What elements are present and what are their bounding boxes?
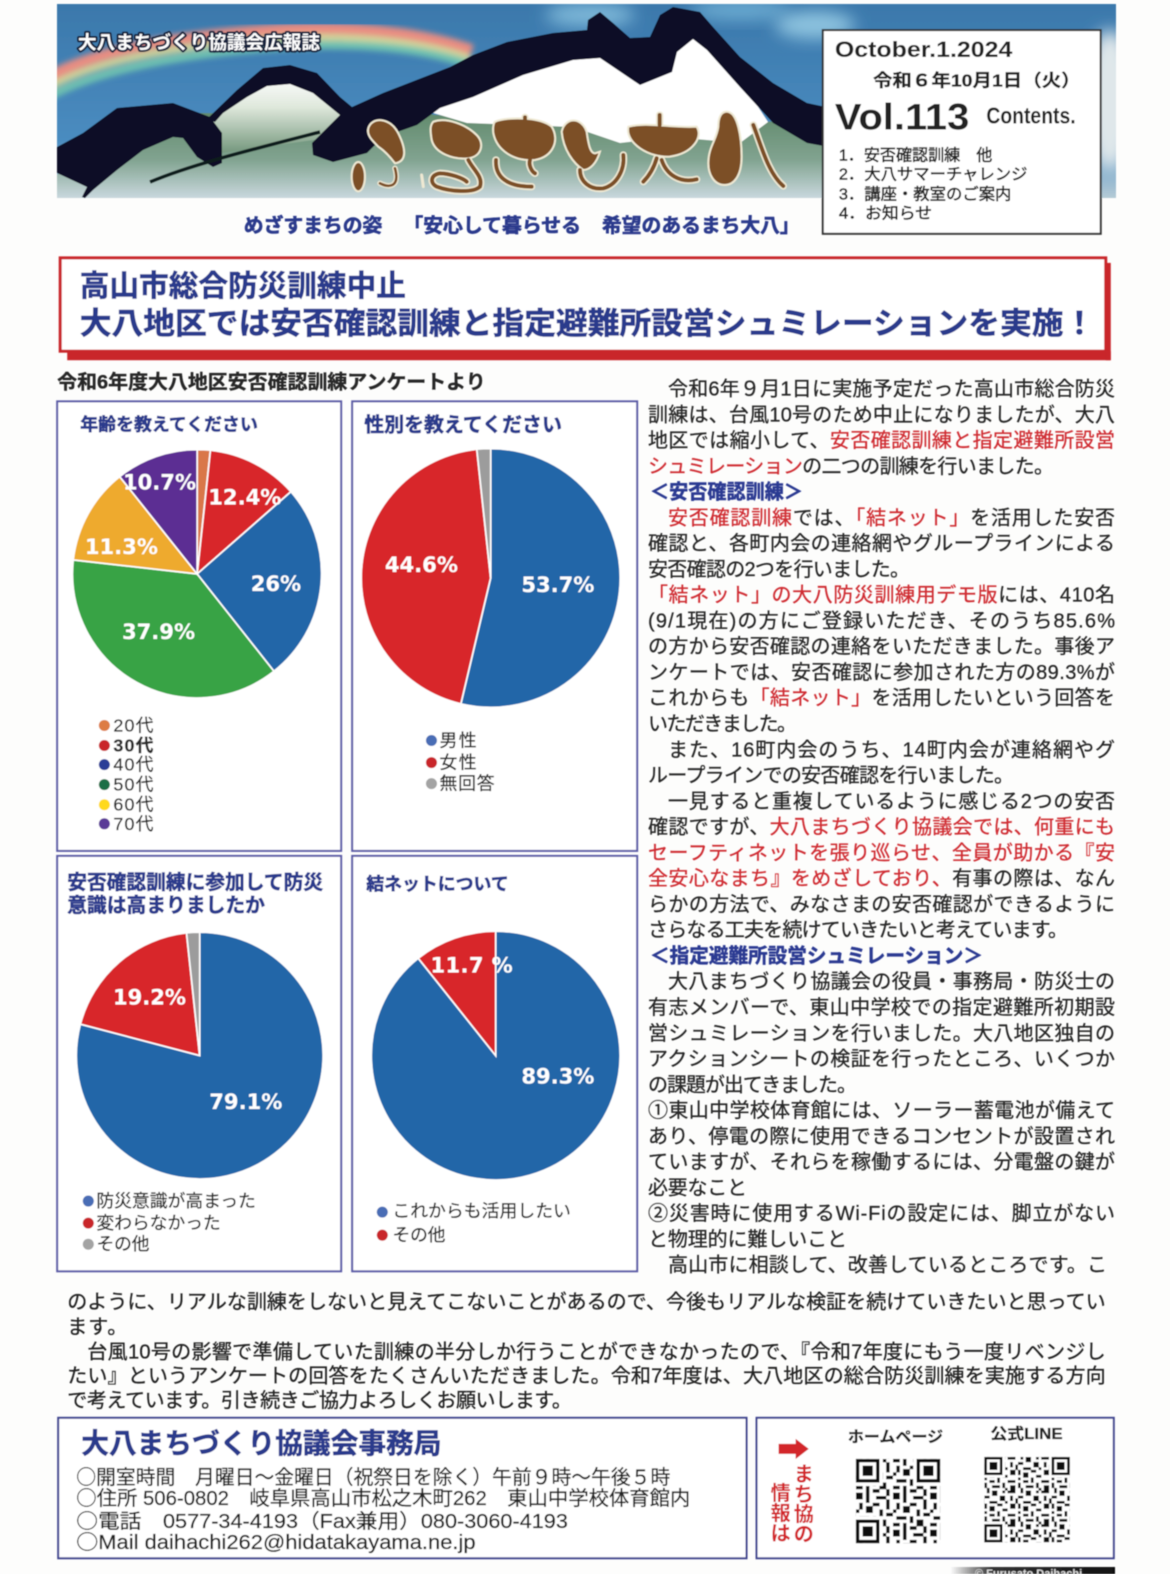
ink mountains <box>57 7 840 198</box>
contents box: Vol.113 <box>835 95 969 137</box>
main article text: 高山市に相談して、改善しているところです。こ <box>668 1254 1107 1277</box>
main article text: 確認と、各町内会の連絡網やグループラインによる <box>648 532 1115 555</box>
office contact box: 大八まちづくり協議会事務局 <box>81 1428 441 1459</box>
snow peak large <box>430 34 768 143</box>
contact details <box>76 1461 690 1555</box>
vision slogan <box>244 214 800 237</box>
vision slogan: めざすまちの姿 <box>244 214 382 237</box>
QR caption: homepage: ホームページ <box>848 1428 943 1446</box>
office contact box <box>58 1418 747 1558</box>
contents list: 4．お知らせ <box>839 205 932 223</box>
vision slogan: 「安心して暮らせる <box>403 215 581 237</box>
closing paragraph: たい』というアンケートの回答をたくさんいただきました。令和7年度は、大八地区の総合防災訓練を実施する方向 <box>67 1365 1106 1388</box>
panel: gender pie chart: 性別を教えてください <box>364 414 562 436</box>
headline box: 大八地区では安否確認訓練と指定避難所設営シュミレーションを実施！ <box>80 307 1095 341</box>
main article text: 安否確認の2つを行いました。 <box>648 558 910 581</box>
panel: Yui-net pie chart: 結ネットについて <box>366 874 509 894</box>
panel: age pie chart: 12.4% <box>208 485 281 510</box>
legend: age: 40代 <box>113 755 154 775</box>
panel: gender pie chart: 44.6% <box>385 552 458 577</box>
main article text: これからも「結ネット」を活用したいという回答を <box>648 687 1115 710</box>
legend: awareness: 防災意識が高まった <box>96 1191 256 1211</box>
main article text: ンケートでは、安否確認に参加された方の89.3%が <box>648 661 1115 684</box>
legend: age: 20代 <box>113 715 154 735</box>
main article text: らかの方法で、みなさまの安否確認ができるように <box>648 893 1115 916</box>
masthead banner <box>40 0 1136 198</box>
legend: Yui-net: その他 <box>392 1225 446 1245</box>
QR code: homepage <box>856 1459 940 1543</box>
main article text: (9/1現在)の方にご登録いただき、そのうち85.6% <box>648 609 1115 632</box>
title lettering ふるさと大八 <box>352 120 423 191</box>
copyright strip <box>950 1567 1115 1574</box>
main article text: と物理的に難しいこと <box>648 1228 847 1251</box>
main article text: の方から安否確認の連絡をいただきました。事後ア <box>648 635 1115 658</box>
legend: awareness <box>83 1191 256 1254</box>
panel: age pie chart: 37.9% <box>122 619 195 644</box>
closing paragraph: で考えています。引き続きご協力よろしくお願いします。 <box>67 1389 572 1412</box>
main article text: いただきました。 <box>648 714 797 736</box>
closing paragraph <box>67 1290 1106 1412</box>
legend: age <box>99 715 154 834</box>
headline box <box>60 258 1111 360</box>
main article text: 確認ですが、大八まちづくり協議会では、何重にも <box>648 816 1115 839</box>
legend: age: 70代 <box>113 814 154 834</box>
QR caption: LINE: 公式LINE <box>990 1425 1063 1443</box>
legend: Yui-net: これからも活用したい <box>392 1201 571 1221</box>
main article text: 必要なこと <box>648 1176 747 1199</box>
main article text: アクションシートの検証を行ったところ、いくつか <box>648 1048 1115 1070</box>
vertical caption: 情報は <box>771 1482 791 1545</box>
closing paragraph: のように、リアルな訓練をしないと見えてこないことがあるので、今後もリアルな検証を続けていきたいと思ってい <box>67 1290 1106 1313</box>
main article text: シュミレーションの二つの訓練を行いました。 <box>648 455 1054 478</box>
main article text: 有志メンバーで、東山中学校での指定避難所初期設 <box>648 996 1115 1019</box>
vision slogan: 希望のあるまち大八」 <box>602 215 800 237</box>
legend: gender: 女性 <box>439 753 477 773</box>
closing paragraph: ます。 <box>67 1317 127 1339</box>
main article text: ていますが、それらを稼働するには、分電盤の鍵が <box>648 1151 1115 1174</box>
main article text: 訓練は、台風10号のため中止になりましたが、大八 <box>648 403 1115 426</box>
vertical caption: まち協の <box>794 1464 814 1546</box>
QR links box <box>757 1418 1114 1558</box>
panel: gender pie chart <box>352 401 637 851</box>
contents box: October.1.2024 <box>835 37 1013 62</box>
panel: age pie chart: 10.7% <box>123 470 196 495</box>
contents list <box>839 147 1027 223</box>
QR code: LINE <box>984 1457 1070 1542</box>
panel: awareness pie chart <box>57 856 341 1271</box>
main article text: 一見すると重複しているように感じる2つの安否 <box>668 790 1115 813</box>
newsletter label: 大八まちづくり協議会広報誌 <box>78 32 320 53</box>
section heading: shelter simulation: ＜指定避難所設営シュミレーション＞ <box>650 944 983 967</box>
contents box: Contents. <box>986 102 1076 128</box>
survey heading: 令和6年度大八地区安否確認訓練アンケートより <box>57 370 486 393</box>
legend: gender: 男性 <box>439 731 477 751</box>
main article text: また、16町内会のうち、14町内会が連絡網やグ <box>668 738 1115 761</box>
icon: red arrow <box>779 1439 809 1459</box>
contact details: ○住所 506-0802 岐阜県高山市松之木町262 東山中学校体育館内 <box>76 1482 690 1511</box>
panel: gender pie chart: 53.7% <box>521 572 594 597</box>
ink ridge line <box>150 132 320 182</box>
main article text: 全安心なまち』をめざしており、有事の際は、なん <box>648 866 1115 890</box>
panel: awareness pie chart: 意識は高まりましたか <box>67 894 265 917</box>
main article text: あり、停電の際に使用できるコンセントが設置され <box>648 1125 1115 1148</box>
panel: awareness pie chart: 安否確認訓練に参加して防災 <box>67 872 323 894</box>
panel: age pie chart: 11.3% <box>85 534 158 559</box>
contact details: ○電話 0577-34-4193（Fax兼用）080-3060-4193 <box>76 1505 568 1534</box>
main article text: 令和6年９月1日に実施予定だった高山市総合防災 <box>668 378 1115 400</box>
legend: awareness: 変わらなかった <box>96 1213 221 1233</box>
panel: Yui-net pie chart: 89.3% <box>521 1064 594 1089</box>
main article text: 地区では縮小して、安否確認訓練と指定避難所設営 <box>648 429 1115 452</box>
main article text: の課題が出てきました。 <box>648 1073 857 1096</box>
panel: age pie chart: 26% <box>251 571 301 596</box>
legend: Yui-net <box>377 1201 571 1245</box>
main article text <box>648 378 1115 1277</box>
headline box: 高山市総合防災訓練中止 <box>80 270 406 303</box>
main article text: ①東山中学校体育館には、ソーラー蓄電池が備えて <box>648 1099 1115 1122</box>
panel: age pie chart: 年齢を教えてください <box>80 414 258 434</box>
legend: awareness: その他 <box>96 1234 150 1254</box>
main article text: ループラインでの安否確認を行いました。 <box>648 764 1014 787</box>
main article text: セーフティネットを張り巡らせ、全員が助かる『安 <box>648 841 1115 864</box>
vertical caption <box>771 1464 814 1546</box>
main article text: 「結ネット」の大八防災訓練用デモ版には、410名 <box>648 584 1115 607</box>
snow peak small <box>212 83 341 152</box>
contents list: 1．安否確認訓練 他 <box>839 147 992 165</box>
contents box <box>823 30 1101 234</box>
contents box: 令和６年10月1日（火） <box>873 70 1081 90</box>
panel: Yui-net pie chart <box>352 856 637 1271</box>
legend: gender <box>426 731 495 794</box>
panel: awareness pie chart: 79.1% <box>209 1089 282 1114</box>
main article text: 大八まちづくり協議会の役員・事務局・防災士の <box>668 970 1115 993</box>
panel: awareness pie chart: 19.2% <box>113 984 186 1009</box>
main article text: 安否確認訓練では、「結ネット」を活用した安否 <box>668 506 1115 529</box>
legend: age: 30代 <box>113 736 154 756</box>
panel: Yui-net pie chart: 11.7 % <box>430 952 513 977</box>
main article text: ②災害時に使用するWi-Fiの設定には、脚立がない <box>648 1202 1115 1225</box>
section heading: safety check drill: ＜安否確認訓練＞ <box>650 481 803 504</box>
rainbow <box>40 28 472 102</box>
main article text: 営シュミレーションを行いました。大八地区独自の <box>648 1022 1115 1045</box>
contact details: ○開室時間 月曜日～金曜日（祝祭日を除く）午前９時～午後５時 <box>76 1461 670 1490</box>
closing paragraph: 台風10号の影響で準備していた訓練の半分しか行うことができなかったので、『令和7年度にもう一度リベンジし <box>87 1341 1106 1364</box>
legend: age: 60代 <box>113 795 154 815</box>
panel: age pie chart <box>57 401 341 851</box>
contact details: ○Mail daihachi262@hidatakayama.ne.jp <box>76 1526 476 1555</box>
legend: age: 50代 <box>113 775 154 795</box>
contents list: 2．大八サマーチャレンジ <box>839 166 1027 184</box>
green ground <box>57 112 830 198</box>
contents list: 3．講座・教室のご案内 <box>839 186 1011 204</box>
main article text: さらなる工夫を続けていきたいと考えています。 <box>648 919 1068 942</box>
legend: gender: 無回答 <box>439 774 495 794</box>
